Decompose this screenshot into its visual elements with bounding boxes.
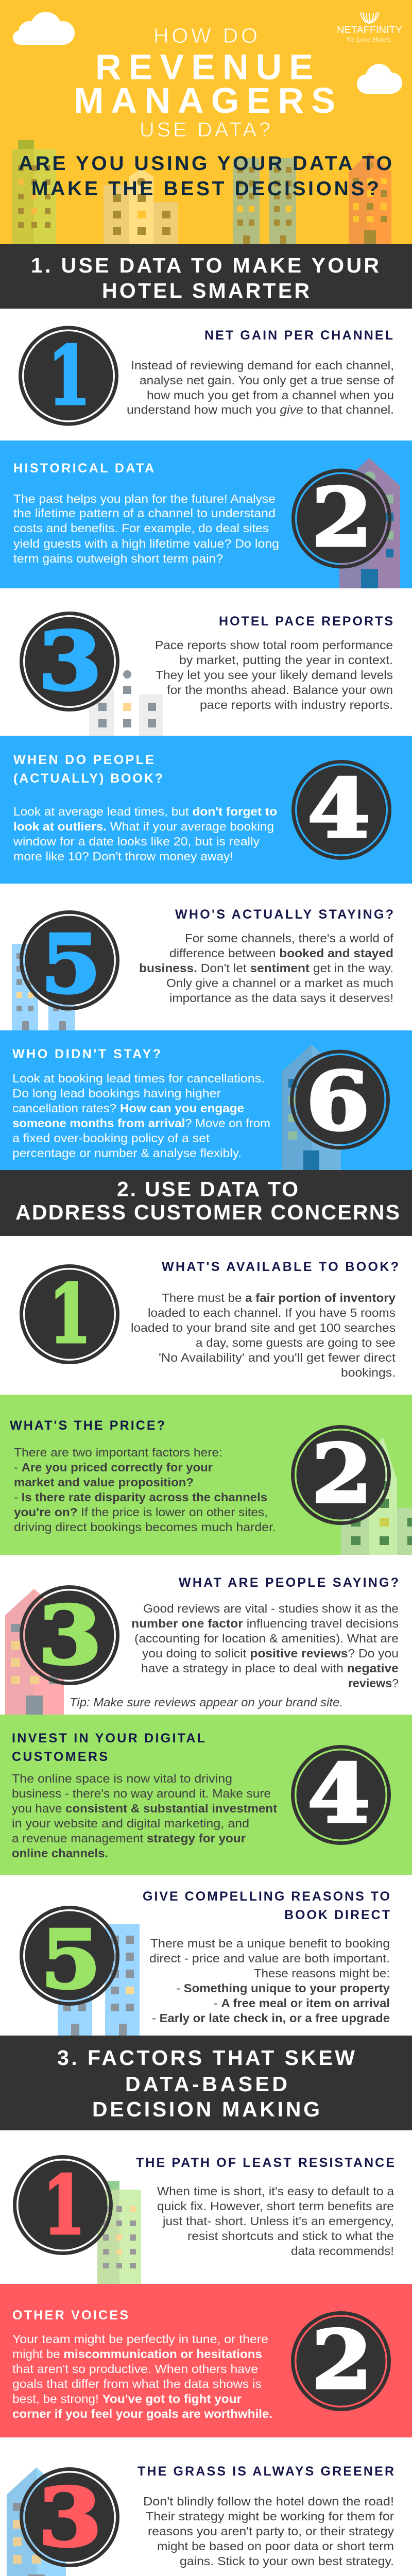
illustration: skyline — [12, 140, 391, 244]
badge: number 4: 4 — [307, 1747, 370, 1841]
building: light green tower — [97, 2181, 141, 2284]
heading: section 2: ADDRESS CUSTOMER CONCERNS — [15, 1200, 400, 1224]
body text: just that- short. Unless it's an emergency, — [162, 2214, 394, 2228]
body text: might be based on poor data or short term — [157, 2539, 394, 2553]
body text: Instead of reviewing demand for each channel, — [131, 359, 394, 372]
body text: business - there's no way around it. Make sure — [12, 1787, 271, 1800]
body text: by market, putting the year in context. — [179, 653, 393, 667]
body text: reasons you aren't party to, or their strategy — [148, 2524, 394, 2538]
title: managers: MANAGERS — [74, 80, 335, 121]
panel: what's available to book — [0, 1236, 412, 1395]
badge: number 2 — [293, 2313, 389, 2409]
logo: NetAffinity: NETAFFINITY — [337, 25, 402, 35]
title: how do: HOW DO — [153, 24, 258, 47]
panel: what are people saying — [0, 1555, 412, 1715]
body text — [131, 1291, 396, 1379]
body text: term gains outweigh short term pain? — [13, 552, 223, 565]
icon: cloud left — [13, 12, 75, 45]
building: blue towers — [58, 1924, 140, 2036]
body text: Look at booking lead times for cancellations. — [12, 1072, 265, 1085]
body text: you doing to solicit positive reviews ? Do you — [142, 1647, 399, 1660]
badge: number 4: 4 — [307, 761, 370, 856]
badge: number 5: 5 — [41, 917, 101, 1011]
body text: driving direct bookings becomes much harder. — [14, 1520, 276, 1534]
body text: loaded to each channel. If you have 5 rooms — [148, 1306, 396, 1319]
badge: number 3: 3 — [38, 614, 102, 708]
title: revenue: REVENUE — [95, 47, 313, 87]
building: slate tower — [282, 1044, 341, 1170]
body text: 'No Availability' and you'll get fewer direct — [159, 1351, 396, 1364]
building: green hotel — [341, 1437, 412, 1555]
body text: For some channels, there's a world of — [185, 931, 394, 945]
body text — [13, 492, 279, 565]
body text: a day, some guests are going to see — [196, 1336, 396, 1349]
badge: number 2 — [293, 1427, 389, 1523]
logo: NetAffinity — [337, 12, 402, 44]
body text: resist shortcuts and stick to what the — [187, 2229, 394, 2243]
panel: the grass is always greener — [0, 2437, 412, 2576]
panel: invest in your digital customers — [0, 1715, 412, 1875]
body text: These reasons might be: — [254, 1967, 390, 1980]
body text: best, be strong! You've got to fight your — [12, 2392, 242, 2405]
body text: The past helps you plan for the future! Analyse — [13, 492, 276, 505]
body text: more like 10? Don't throw money away! — [13, 850, 233, 863]
body text — [131, 1602, 399, 1690]
badge: number 6: 6 — [306, 1054, 370, 1148]
body text: - A free meal or item on arrival — [214, 1996, 390, 2010]
heading: section 2: 2. USE DATA TO — [117, 1177, 298, 1201]
heading: (ACTUALLY) BOOK? — [13, 771, 163, 786]
body text: a fixed over-booking policy of a set — [12, 1131, 210, 1145]
body text — [157, 2184, 394, 2258]
badge: number 6 — [291, 1052, 388, 1148]
body text: data recommends! — [291, 2244, 394, 2258]
title: use data: USE DATA? — [140, 118, 270, 141]
body text: window for a date looks like 20, but is really — [13, 835, 260, 848]
heading: section 1: 1. USE DATA TO MAKE YOUR — [31, 253, 379, 277]
body text: goals that differ from what the data shows is — [12, 2377, 262, 2391]
body text: look at outliers. What if your average booking — [13, 820, 274, 833]
body text: Good reviews are vital - studies show it as the — [143, 1602, 399, 1615]
panel: when do people book — [0, 736, 412, 884]
body text: The online space is now vital to driving — [12, 1772, 232, 1785]
heading: CUSTOMERS — [12, 1750, 108, 1764]
body text: online channels. — [12, 1846, 108, 1860]
body text: loaded to your brand site and get 100 searches — [131, 1321, 396, 1334]
body text: importance as the data says it deserves! — [169, 991, 393, 1005]
body text: (accounting for location & amenities). What are — [134, 1632, 399, 1645]
badge: number 2: 2 — [312, 2313, 372, 2407]
heading: section 3: DATA-BASED — [125, 2072, 287, 2096]
badge: number 4 — [293, 1747, 389, 1843]
badge: number 2: 2 — [312, 470, 372, 565]
body text: might be miscommunication or hesitations — [12, 2347, 262, 2361]
heading: WHAT'S AVAILABLE TO BOOK? — [162, 1260, 399, 1274]
body text: Do long lead bookings having higher — [12, 1087, 221, 1100]
icon: cloud right — [357, 64, 402, 94]
badge: number 3 — [22, 2469, 117, 2566]
body text: They let you see your likely demand levels — [156, 668, 393, 682]
badge: number 3: 3 — [38, 1588, 102, 1683]
body text: percentage or number & analyse flexibly. — [12, 1146, 242, 1160]
building: blue tower — [7, 2467, 66, 2576]
body text — [127, 359, 394, 416]
body text: a revenue management strategy for your — [12, 1832, 246, 1845]
heading: BOOK DIRECT — [284, 1908, 390, 1922]
heading: WHO DIDN'T STAY? — [12, 1047, 161, 1061]
building: orange tower — [349, 152, 391, 244]
building: pale hotel — [89, 670, 163, 736]
panel: who didn't stay — [0, 1030, 412, 1170]
body text: in your website and digital marketing, and — [12, 1817, 249, 1830]
body text: analyse net gain. You only get a true sense of — [140, 374, 394, 387]
badge: number 1 — [21, 328, 116, 424]
body text: business. Don't let sentiment get in the way. — [139, 961, 393, 975]
body text — [12, 1772, 277, 1860]
heading: section 2 — [0, 1170, 412, 1236]
body text: you have consistent & substantial investment — [12, 1802, 277, 1815]
badge: number 2: 2 — [312, 1427, 372, 1521]
heading: GIVE COMPELLING REASONS TO — [143, 1889, 390, 1904]
body text: number one factor influencing travel decisions — [131, 1617, 399, 1630]
heading: section 1 — [0, 244, 412, 309]
badge: number 3 — [22, 613, 117, 710]
heading: WHO'S ACTUALLY STAYING? — [175, 907, 393, 922]
body text — [12, 1072, 270, 1160]
body text: someone months from arrival ? Move on from — [12, 1116, 270, 1130]
panel: who's actually staying — [0, 884, 412, 1030]
body text — [139, 931, 394, 1005]
body text — [13, 805, 277, 863]
badge: number 1 — [22, 1266, 117, 1362]
subtitle: MAKE THE BEST DECISIONS? — [31, 178, 379, 200]
building: lilac tower — [339, 458, 400, 589]
panel: other voices — [0, 2284, 412, 2437]
logo: NetAffinity: We Love Hotels — [346, 36, 391, 44]
body text: quick fix. However, short term benefits are — [157, 2199, 394, 2213]
heading: HOTEL PACE REPORTS — [219, 614, 393, 629]
badge: number 1: 1 — [48, 329, 91, 423]
building: pink tower — [5, 1589, 64, 1715]
heading: section 3: DECISION MAKING — [92, 2097, 320, 2121]
body text: Their strategy might be working for them for — [146, 2510, 394, 2523]
body text: cancellation rates? How can you engage — [12, 1101, 244, 1115]
badge: number 1: 1 — [49, 1267, 91, 1361]
panel: give compelling reasons — [0, 1875, 412, 2036]
body text: costs and benefits. For example, do deal sites — [13, 521, 269, 535]
panel: header — [0, 0, 412, 244]
heading: NET GAIN PER CHANNEL — [204, 328, 393, 343]
body text — [12, 2332, 272, 2420]
badge: number 5 — [22, 912, 117, 1011]
heading — [13, 753, 163, 786]
heading — [143, 1889, 390, 1922]
body text: Look at average lead times, but don't forget to — [13, 805, 277, 818]
panel: net gain per channel — [0, 309, 412, 440]
body text: There must be a unique benefit to booking — [150, 1937, 390, 1950]
body text: have a strategy in place to deal with negative — [141, 1662, 399, 1675]
tip: Tip: Make sure reviews appear on your brand site. — [70, 1696, 343, 1709]
body text: - Early or late check in, or a free upgrade — [152, 2011, 390, 2025]
subtitle — [19, 152, 392, 200]
heading: WHAT'S THE PRICE? — [10, 1418, 165, 1433]
body text: how much you get from a channel when you — [147, 388, 394, 402]
body text — [14, 1446, 276, 1534]
badge: number 5: 5 — [41, 1912, 101, 2007]
body text: - Are you priced correctly for your — [14, 1461, 213, 1474]
body text: When time is short, it's easy to default to a — [157, 2184, 394, 2198]
body text: Only give a channel or a market as much — [166, 976, 393, 990]
body text: understand how much you give to that channel. — [127, 403, 394, 416]
body text: yield guests with a high lifetime value? Do long — [13, 537, 279, 550]
body text: for the months ahead. Balance your own — [167, 683, 393, 697]
badge: number 3 — [22, 1587, 117, 1684]
panel: what's the price — [0, 1395, 412, 1555]
body text: difference between booked and stayed — [169, 946, 393, 960]
badge: number 2 — [294, 470, 389, 567]
heading: HISTORICAL DATA — [13, 461, 154, 476]
body text: gains. Stick to your own best strategy. — [180, 2554, 394, 2568]
body text: - Something unique to your property — [176, 1981, 390, 1995]
body text: pace reports with industry reports. — [200, 698, 393, 711]
body text: you're on? If the price is lower on other sites, — [14, 1505, 268, 1519]
panel: historical data — [0, 440, 412, 589]
building: cream hotel — [104, 168, 178, 244]
panel: hotel pace reports — [0, 588, 412, 736]
building: green tower — [12, 140, 56, 244]
panel: the path of least resistance — [0, 2130, 412, 2284]
body text: bookings. — [341, 1366, 396, 1379]
heading: OTHER VOICES — [12, 2308, 128, 2323]
body text — [149, 1937, 390, 2025]
heading: section 3 — [0, 2036, 412, 2130]
building: twin towers — [233, 158, 296, 244]
heading: INVEST IN YOUR DIGITAL — [12, 1731, 205, 1745]
heading: section 3: 3. FACTORS THAT SKEW — [57, 2046, 355, 2070]
subtitle: ARE YOU USING YOUR DATA TO — [19, 152, 392, 175]
body text: reviews? — [348, 1676, 399, 1690]
badge: number 1 — [14, 2157, 111, 2253]
body text: There are two important factors here: — [14, 1446, 222, 1459]
body text — [143, 2495, 394, 2568]
building: blue towers — [12, 944, 75, 1030]
body text: direct - price and value are both important. — [149, 1952, 390, 1965]
badge: number 5 — [22, 1907, 117, 2007]
body text: There must be a fair portion of inventory — [162, 1291, 396, 1304]
badge: number 3: 3 — [38, 2470, 102, 2565]
badge: number 4 — [294, 761, 389, 858]
heading: WHAT ARE PEOPLE SAYING? — [179, 1575, 399, 1590]
body text: Don't blindly follow the hotel down the road! — [143, 2495, 394, 2508]
heading: section 1: HOTEL SMARTER — [102, 279, 310, 302]
body text: that aren't so productive. When others have — [12, 2362, 258, 2376]
body text — [155, 638, 393, 711]
heading — [12, 1731, 205, 1764]
body text: Your team might be perfectly in tune, or there — [12, 2332, 268, 2346]
body text: Pace reports show total room performance — [155, 638, 393, 652]
badge: number 1: 1 — [43, 2158, 85, 2252]
body text: the lifetime pattern of a channel to understand — [13, 506, 276, 520]
heading: THE PATH OF LEAST RESISTANCE — [136, 2156, 394, 2170]
body text: - Is there rate disparity across the channels — [14, 1490, 267, 1504]
body text: market and value proposition? — [14, 1476, 194, 1489]
body text: corner if you feel your goals are worthwhile. — [12, 2407, 272, 2420]
heading: THE GRASS IS ALWAYS GREENER — [138, 2464, 394, 2479]
heading: WHEN DO PEOPLE — [13, 753, 154, 767]
